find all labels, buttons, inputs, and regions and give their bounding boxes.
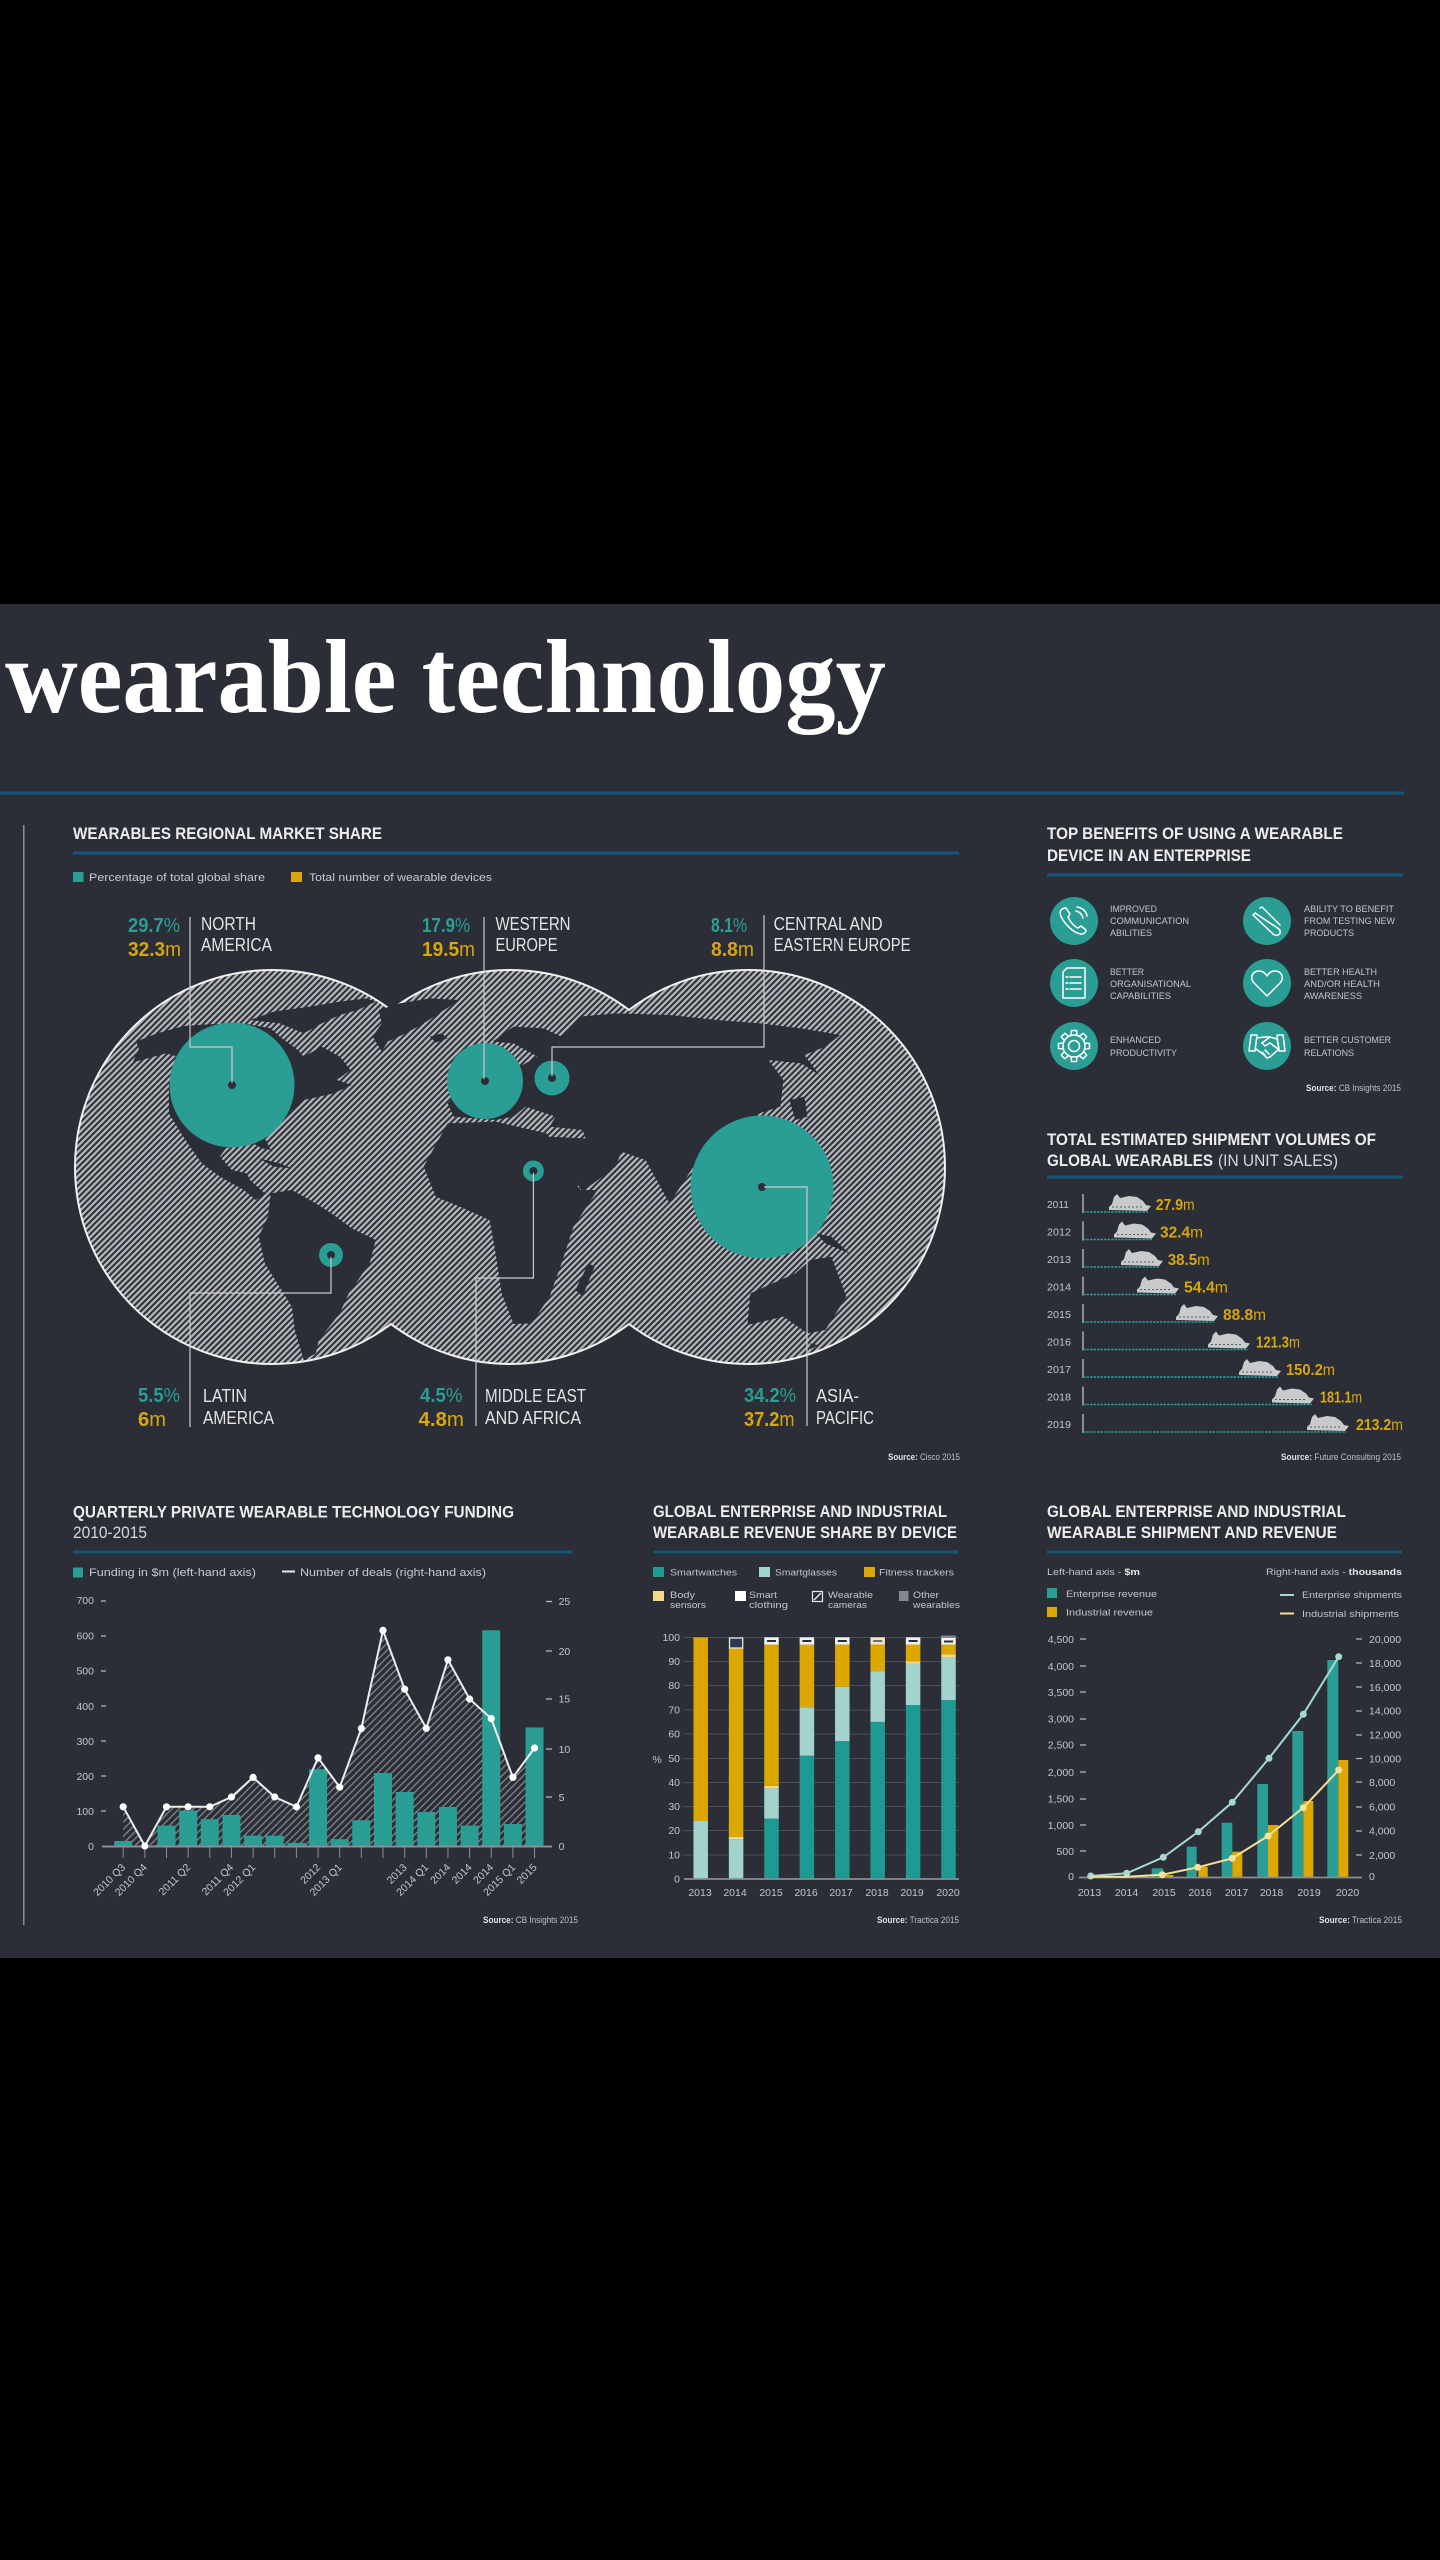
label: Latin America [138,1385,274,1431]
legend: right axis: Enterprise shipments [1302,1590,1402,1601]
benefit text: relations: RELATIONS [1304,1048,1354,1059]
left axis: revenue: 500 [1056,1846,1074,1858]
left axis: revenue [1048,1634,1086,1883]
heading: top benefits [1047,825,1343,865]
right axis: shipments [1356,1634,1401,1883]
ship row: 2018: 181.1m [1320,1390,1362,1406]
x axis: funding: 2013 Q1 [308,1862,345,1899]
label: Middle East and Africa [418,1385,586,1431]
stacked bars: 2015 [764,1637,779,1879]
legend: map: Percentage of total global share [89,872,265,884]
left axis: revenue: 1,500 [1048,1794,1074,1806]
heading: shipment and revenue: WEARABLE SHIPMENT AND REVENUE [1047,1524,1337,1542]
bubble: North America [170,1022,294,1148]
legend: right axis [1266,1567,1402,1620]
icon: heart [1243,959,1291,1007]
x axis: years [684,1879,960,1899]
label: Asia-Pacific: PACIFIC [816,1408,874,1428]
label: Middle East and Africa: AND AFRICA [485,1408,581,1428]
left axis: funding: 100 [76,1806,94,1818]
legend: devices: Smartglasses [775,1568,837,1578]
ship row: 2016: 2016 [1047,1336,1071,1348]
ship row: 2012 [1047,1222,1203,1242]
benefit text: productivity [1110,1035,1178,1059]
legend: left axis: Left-hand axis - $m [1047,1567,1140,1578]
legend: devices [653,1567,960,1611]
panel: regional market share [73,825,960,1462]
x axis: years: 2020 [936,1887,960,1899]
benefit text: communication: IMPROVED [1110,904,1157,915]
ship row: 2014: 2014 [1047,1282,1071,1294]
y axis: percent: 90 [668,1656,680,1668]
bubble: Western Europe [447,1043,523,1119]
ship row: 2015: 2015 [1047,1309,1071,1321]
right axis: deals: 0 [559,1841,565,1853]
line: number of deals [120,1627,538,1850]
stacked bars: 2018 [870,1637,885,1879]
y axis: percent: 20 [668,1825,680,1837]
legend: funding [73,1567,486,1579]
heading: revenue share: GLOBAL ENTERPRISE AND INDUSTRIAL [653,1503,947,1521]
y axis: percent: 0 [674,1874,680,1886]
right axis: shipments: 6,000 [1369,1802,1395,1814]
heading: quarterly funding [73,1504,514,1542]
left axis: funding: 200 [76,1771,94,1783]
benefit text: relations [1304,1035,1391,1059]
heading: shipment and revenue: GLOBAL ENTERPRISE AND INDUSTRIAL [1047,1503,1346,1521]
icon: gear [1050,1022,1098,1070]
label: Latin America: 5.5% [138,1385,180,1407]
ship row: 2017 [1047,1359,1335,1379]
y axis: percent: 100 [662,1632,680,1644]
legend: devices: sensors [670,1600,706,1611]
panel: quarterly funding [73,1504,578,1925]
ship row: 2012: 32.4m [1160,1224,1203,1242]
ship row: 2016 [1047,1332,1300,1352]
stacked bars: 2016 [800,1637,814,1879]
x axis: funding: 2011 Q2 [157,1862,193,1898]
benefit text: testing: ABILITY TO BENEFIT [1304,904,1394,915]
label: Western Europe: WESTERN [496,914,570,934]
label: Middle East and Africa: MIDDLE EAST [485,1386,586,1406]
title rule [0,792,1404,794]
left axis: funding [76,1595,106,1853]
ship row: 2019: 2019 [1047,1419,1071,1431]
legend: devices: cameras [828,1600,867,1611]
legend: devices: clothing [749,1600,788,1611]
heading: shipment volumes: GLOBAL WEARABLES [1047,1152,1213,1170]
stacked bars: 2017 [835,1637,850,1879]
ship row: 2018 [1047,1386,1362,1406]
right axis: deals: 20 [559,1646,570,1658]
benefit text: health: AND/OR HEALTH [1304,979,1380,990]
x axis: years: 2013 [688,1887,712,1899]
right axis: shipments: 0 [1369,1871,1375,1883]
benefit text: health [1304,967,1380,1002]
left margin rule [23,825,24,1925]
x axis: funding: 2013 [385,1862,410,1887]
label: North America: AMERICA [201,935,272,955]
ship row: 2014 [1047,1276,1228,1296]
label: Asia-Pacific: 37.2m [744,1409,794,1431]
ship row: 2016: 121.3m [1256,1334,1300,1352]
benefit text: productivity: ENHANCED [1110,1035,1161,1046]
ship row: 2017: 2017 [1047,1364,1071,1376]
left axis: revenue: 4,000 [1048,1661,1074,1673]
x axis: years: 2013 [1078,1887,1101,1899]
bars: industrial revenue [1163,1760,1348,1878]
legend: funding: Number of deals (right-hand axis) [300,1567,486,1579]
right axis: shipments: 10,000 [1369,1753,1401,1765]
x axis: funding: 2010 Q3 [91,1862,128,1899]
y axis: percent [652,1632,959,1886]
line: enterprise shipments [1087,1653,1342,1880]
infographic card [0,604,1440,1958]
left axis: revenue: 3,500 [1048,1687,1074,1699]
benefit text: communication [1110,904,1189,939]
x axis: years: 2017 [829,1887,853,1899]
heading: regional market share: WEARABLES REGIONAL MARKET SHARE [73,825,382,843]
benefit text: testing: FROM TESTING NEW [1304,916,1395,927]
right axis: deals: 25 [559,1596,570,1608]
ship row: 2014: 54.4m [1184,1280,1228,1296]
left axis: revenue: 2,000 [1048,1767,1074,1779]
legend: devices: Smart [749,1590,777,1601]
icon: document checklist [1050,959,1098,1007]
y axis: percent: % [652,1754,662,1766]
label: Western Europe [422,914,570,961]
legend: devices: wearables [912,1600,960,1611]
right axis: deals: 15 [559,1694,570,1706]
right axis: deals: 10 [559,1744,570,1756]
label: North America: 32.3m [128,939,181,961]
ship row: 2018: 2018 [1047,1392,1071,1404]
ship row: 2011 [1047,1194,1195,1214]
ship row: 2013: 38.5m [1168,1252,1210,1269]
x axis: years: 2018 [865,1887,889,1899]
x axis: years: 2019 [1297,1887,1321,1899]
benefit text: organisational [1110,967,1191,1002]
label: Latin America: LATIN [203,1386,247,1406]
world map [76,971,944,1363]
x axis: years [1078,1878,1362,1899]
y axis: percent: 30 [668,1801,680,1813]
left axis: funding: 400 [76,1701,94,1713]
y axis: percent: 60 [668,1728,680,1740]
x axis: years: 2016 [1188,1887,1212,1899]
stacked bars: 2020 [941,1636,956,1879]
title: wearable technology [5,618,886,735]
benefit text: testing [1304,904,1395,939]
ship row: 2015 [1047,1304,1266,1324]
label: Latin America: 6m [138,1409,166,1431]
stacked bars: 2013 [693,1637,708,1879]
label: Asia-Pacific: ASIA- [816,1386,859,1406]
x axis: years: 2019 [900,1887,924,1899]
y axis: percent: 10 [668,1850,680,1862]
legend: devices: Other [913,1590,939,1601]
x axis: funding: 2014 [450,1862,475,1887]
benefit text: productivity: PRODUCTIVITY [1110,1048,1178,1059]
legend: funding: Funding in $m (left-hand axis) [89,1567,256,1579]
right axis: shipments: 14,000 [1369,1706,1401,1718]
x axis: funding: 2014 Q1 [394,1862,431,1899]
x axis: funding: 2014 [471,1862,496,1887]
stacked bars: 2014 [729,1638,743,1879]
left axis: funding: 500 [76,1666,94,1678]
label: Central and Eastern Europe: 8.8m [711,939,754,961]
icon: test strip [1243,897,1291,945]
source: Tractica: Source: Tractica 2015 [877,1915,959,1925]
label: Western Europe: 17.9% [422,915,470,937]
left axis: revenue: 1,000 [1048,1820,1074,1832]
benefit text: testing: PRODUCTS [1304,928,1354,939]
label: North America: NORTH [201,914,256,934]
right axis: shipments: 12,000 [1369,1730,1401,1742]
right axis: shipments: 2,000 [1369,1850,1395,1862]
ship row: 2015: 88.8m [1223,1307,1266,1324]
icon: handshake [1243,1022,1291,1070]
leader lines [190,915,807,1427]
label: Middle East and Africa: 4.8m [418,1409,464,1431]
ship row: 2011: 2011 [1047,1199,1069,1211]
right axis: shipments: 16,000 [1369,1682,1401,1694]
ship row: 2012: 2012 [1047,1226,1071,1238]
ship row: 2013: 2013 [1047,1254,1071,1266]
bubble: Latin America [319,1243,343,1267]
panel: top benefits [1047,825,1403,1093]
heading: shipment volumes [1047,1131,1376,1170]
source: CB Insights: Source: CB Insights 2015 [483,1915,578,1925]
heading: shipment volumes: (IN UNIT SALES) [1218,1152,1338,1170]
x axis: funding: 2015 Q1 [481,1862,518,1899]
heading: quarterly funding: 2010-2015 [73,1524,147,1542]
heading: shipment and revenue [1047,1503,1346,1542]
y axis: percent: 70 [668,1704,680,1716]
benefit text: communication: ABILITIES [1110,928,1152,939]
left axis: funding: 300 [76,1736,94,1748]
panel: shipment volumes [1047,1131,1403,1462]
bubble: Central and Eastern Europe [534,1060,570,1096]
heading: shipment volumes: TOTAL ESTIMATED SHIPMENT VOLUMES OF [1047,1131,1376,1149]
legend: map [73,872,493,884]
left axis: funding: 0 [88,1841,94,1853]
y axis: percent: 40 [668,1777,680,1789]
x axis: funding: 2012 [298,1862,323,1887]
ship row: 2019 [1047,1414,1403,1434]
benefit text: relations: BETTER CUSTOMER [1304,1035,1391,1046]
label: Latin America: AMERICA [203,1408,274,1428]
heading: revenue share [653,1503,957,1542]
source: Tractica: Source: Tractica 2015 [1319,1915,1402,1925]
right axis: deals [546,1596,570,1853]
x axis: funding: 2012 Q1 [221,1862,258,1899]
ship row: 2019: 213.2m [1356,1417,1403,1434]
x axis: years: 2015 [759,1887,783,1899]
x axis: years: 2015 [1152,1887,1176,1899]
legend: left axis: Industrial revenue [1066,1608,1153,1618]
right axis: shipments: 8,000 [1369,1777,1395,1789]
left axis: funding: 700 [76,1595,94,1607]
x axis: years: 2017 [1225,1887,1248,1899]
label: Central and Eastern Europe [711,914,911,961]
legend: left axis: Enterprise revenue [1066,1589,1157,1600]
legend: right axis: Industrial shipments [1302,1609,1399,1620]
stacked bars: 2019 [906,1637,920,1879]
label: Central and Eastern Europe: 8.1% [711,915,747,937]
label: Western Europe: 19.5m [422,939,475,961]
benefit text: organisational: BETTER [1110,967,1144,978]
source: Cisco: Source: Cisco 2015 [888,1452,960,1462]
x axis: funding: 2010 Q4 [113,1862,150,1899]
ship row: 2017: 150.2m [1286,1362,1335,1379]
right axis: shipments: 20,000 [1369,1634,1401,1646]
x axis: funding: 2011 Q4 [200,1862,236,1898]
benefit text: health: BETTER HEALTH [1304,967,1377,978]
legend: devices: Fitness trackers [879,1568,954,1578]
label: North America: 29.7% [128,915,180,937]
y axis: percent: 50 [668,1753,680,1765]
label: Asia-Pacific: 34.2% [744,1385,796,1407]
x axis: years: 2014 [1115,1887,1138,1899]
right axis: shipments: 4,000 [1369,1826,1395,1838]
source: Future Consulting: Source: Future Consulting 2015 [1281,1452,1401,1462]
panel: revenue share by device [652,1503,960,1925]
bubble: Middle East and Africa [523,1160,544,1182]
ship row: 2011: 27.9m [1156,1197,1195,1214]
label: Asia-Pacific [744,1385,874,1431]
left axis: funding: 600 [76,1630,94,1642]
bars: enterprise revenue [1152,1660,1338,1878]
heading: top benefits: TOP BENEFITS OF USING A WEARABLE [1047,825,1343,843]
hatched area under deals line [123,1630,535,1846]
legend: map: Total number of wearable devices [309,872,493,884]
label: Central and Eastern Europe: CENTRAL AND [774,914,883,934]
legend: devices: Wearable [828,1590,873,1601]
bubble: Asia-Pacific [690,1116,834,1258]
benefit text: organisational: CAPABILITIES [1110,991,1171,1002]
label: Central and Eastern Europe: EASTERN EUROPE [774,935,911,955]
label: Western Europe: EUROPE [496,935,558,955]
x axis: years: 2018 [1260,1887,1283,1899]
line: industrial shipments [1091,1766,1342,1878]
left axis: revenue: 3,000 [1048,1714,1074,1726]
heading: top benefits: DEVICE IN AN ENTERPRISE [1047,847,1251,865]
benefit text: communication: COMMUNICATION [1110,916,1189,927]
benefit text: health: AWARENESS [1304,991,1362,1002]
panel: shipment and revenue [1047,1503,1402,1925]
x axis: years: 2016 [794,1887,818,1899]
legend: devices: Body [670,1590,695,1601]
legend: devices: Smartwatches [670,1568,737,1578]
x axis: funding: 2015 [515,1862,540,1887]
x axis: years: 2014 [723,1887,747,1899]
heading: revenue share: WEARABLE REVENUE SHARE BY DEVICE [653,1524,957,1542]
y axis: percent: 80 [668,1680,680,1692]
left axis: revenue: 2,500 [1048,1740,1074,1752]
x axis: funding: 2014 [428,1862,453,1887]
left axis: revenue: 4,500 [1048,1634,1074,1646]
icon: phone [1050,897,1098,945]
heading: quarterly funding: QUARTERLY PRIVATE WEARABLE TECHNOLOGY FUNDING [73,1504,514,1522]
left axis: revenue: 0 [1068,1871,1074,1883]
bars: funding [114,1630,544,1846]
legend: left axis [1047,1567,1157,1618]
x axis: funding [91,1846,552,1899]
label: North America [128,914,272,961]
ship row: 2013 [1047,1249,1210,1269]
source: CB Insights: Source: CB Insights 2015 [1306,1083,1401,1093]
x axis: years: 2020 [1336,1887,1359,1899]
right axis: deals: 5 [559,1792,565,1804]
benefit text: organisational: ORGANISATIONAL [1110,979,1191,990]
label: Middle East and Africa: 4.5% [420,1385,463,1407]
legend: right axis: Right-hand axis - thousands [1266,1567,1402,1578]
right axis: shipments: 18,000 [1369,1658,1401,1670]
